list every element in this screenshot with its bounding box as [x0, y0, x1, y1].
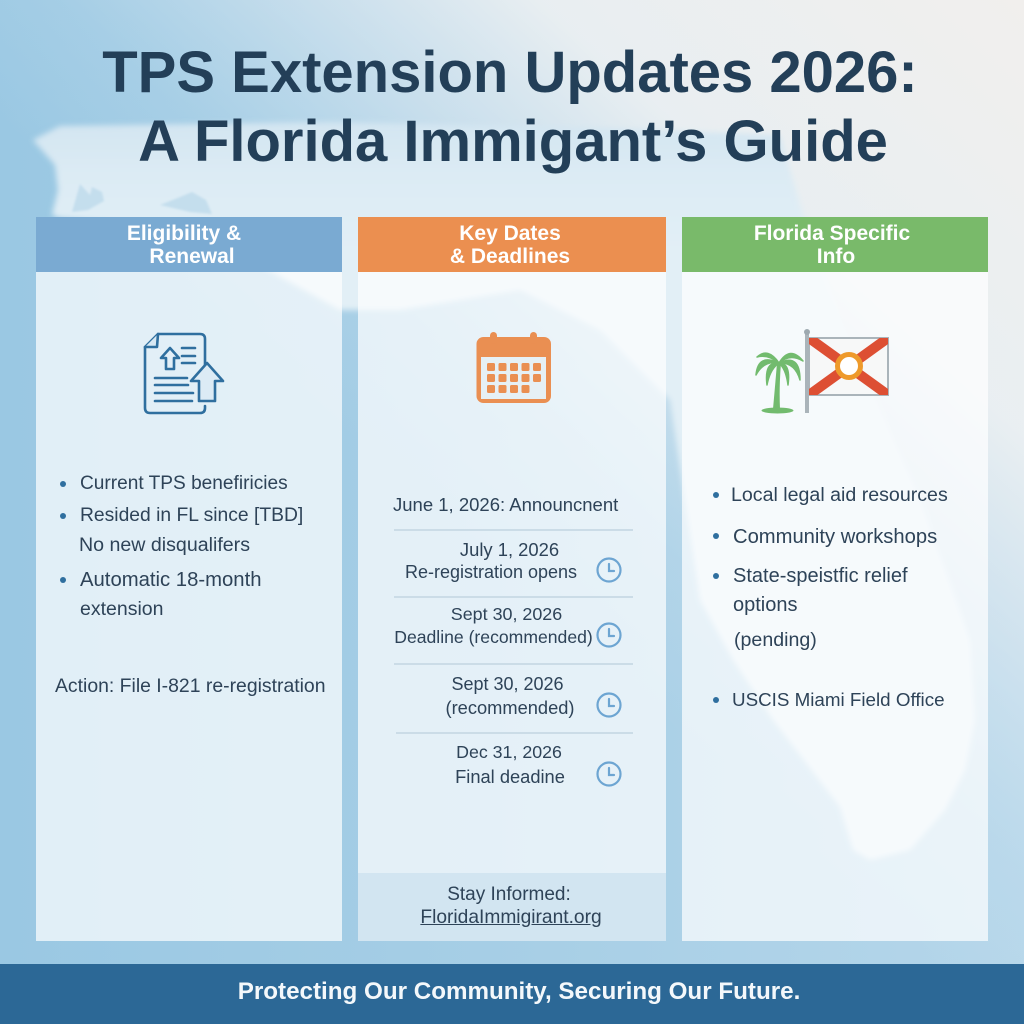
- action text: Action: File I-821 re-registration: [55, 675, 326, 697]
- icon: clock: [596, 557, 622, 583]
- bullet list: Florida resources: State-speistfic relief: [733, 565, 908, 587]
- heading: key dates and deadlines: Key Dates: [459, 222, 561, 245]
- icon: clock: [596, 761, 622, 787]
- callout: stay informed: [358, 873, 666, 941]
- bullet list: eligibility: No new disqualifers: [79, 534, 250, 556]
- bullet list: Florida resources: options: [733, 594, 798, 616]
- panel: Florida specific info: [682, 217, 988, 941]
- icon: clock: [596, 622, 622, 648]
- date: Dec 31 final deadline: [455, 742, 622, 787]
- date: Sept 30 recommended: (recommended): [445, 697, 575, 718]
- bullet list: Florida resources: Local legal aid resources: [731, 484, 948, 506]
- bullet list: Florida resources: Community workshops: [733, 526, 937, 548]
- footer banner: [0, 964, 1024, 1024]
- date: Sept 30 deadline: [394, 604, 622, 648]
- date: July 1 re-registration opens: Re-registration opens: [405, 562, 577, 582]
- date: June 1 announcement: June 1, 2026: Announcnent: [393, 494, 618, 515]
- date: July 1 re-registration opens: [405, 539, 622, 583]
- bullet list: Florida resources: (pending): [734, 629, 817, 651]
- title: TPS Extension Updates 2026:: [102, 40, 918, 105]
- date: Sept 30 recommended: [445, 674, 622, 718]
- panel: eligibility and renewal: [36, 217, 342, 941]
- date: Sept 30 recommended: Sept 30, 2026: [451, 674, 564, 694]
- icon: Florida flag: [804, 329, 889, 413]
- heading: eligibility and renewal: Eligibility &: [127, 222, 241, 245]
- icon: document with upload arrows: [144, 332, 224, 414]
- date: July 1 re-registration opens: July 1, 2026: [460, 539, 559, 560]
- heading: Florida specific info: [682, 217, 988, 272]
- callout: stay informed: FloridaImmigirant.org: [420, 907, 602, 928]
- bullet list: eligibility: extension: [80, 598, 163, 620]
- heading: eligibility and renewal: [36, 217, 342, 272]
- icon: clock: [596, 692, 622, 718]
- title: A Florida Immigant’s Guide: [138, 109, 888, 174]
- bullet list: eligibility: Resided in FL since [TBD]: [80, 505, 303, 526]
- title: [102, 40, 918, 174]
- date: Dec 31 final deadline: Final deadine: [455, 766, 565, 787]
- callout: stay informed: Stay Informed:: [447, 884, 571, 905]
- heading: Florida specific info: Info: [817, 245, 855, 268]
- heading: key dates and deadlines: [358, 217, 666, 272]
- date: Sept 30 deadline: Deadline (recommended): [394, 627, 593, 647]
- heading: key dates and deadlines: & Deadlines: [450, 245, 570, 268]
- footer banner: Protecting Our Community, Securing Our Future.: [238, 978, 800, 1005]
- heading: eligibility and renewal: Renewal: [149, 245, 235, 268]
- bullet list: eligibility: Current TPS benefiricies: [80, 473, 288, 494]
- bullet list: eligibility: Automatic 18-month: [80, 569, 262, 591]
- bullet list: Florida resources: USCIS Miami Field Office: [732, 689, 945, 710]
- date: Dec 31 final deadline: Dec 31, 2026: [456, 742, 562, 762]
- panel: key dates and deadlines: [358, 217, 666, 941]
- date: Sept 30 deadline: Sept 30, 2026: [451, 604, 562, 624]
- icon: palm tree: [755, 352, 804, 414]
- bullet list: Florida resources: [713, 484, 948, 710]
- bullet list: eligibility: [60, 473, 303, 620]
- heading: Florida specific info: Florida Specific: [754, 222, 910, 245]
- icon: calendar: [476, 332, 551, 403]
